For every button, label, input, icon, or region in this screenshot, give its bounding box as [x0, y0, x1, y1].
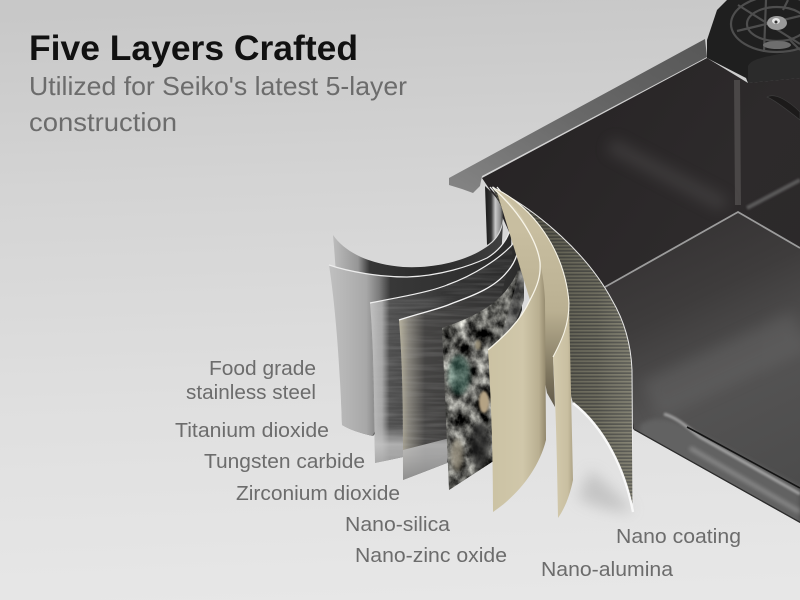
sink rim [449, 39, 707, 193]
label: titanium dioxide: Titanium dioxide [175, 420, 329, 442]
layer: tungsten carbide [370, 187, 520, 465]
sink lower lip [634, 414, 800, 530]
label: nano-silica: Nano-silica [345, 514, 451, 536]
bottle rinser [707, 0, 800, 83]
sink inner corner seams [605, 212, 800, 287]
subtitle: construction [29, 107, 177, 137]
rinser front lip [748, 50, 800, 83]
layer: titanium dioxide [329, 187, 512, 436]
layer: hinge strip [485, 186, 503, 245]
sink basin [482, 58, 800, 530]
layer: food grade stainless steel [333, 222, 503, 436]
label: food grade stainless steel: stainless steel [186, 382, 316, 404]
layer: nano-silica marble [442, 267, 524, 490]
label: nano-alumina: Nano-alumina [541, 559, 674, 581]
sink front wall floor [605, 212, 800, 523]
alumina inner face [496, 189, 569, 407]
subtitle: Utilized for Seiko's latest 5-layer [29, 71, 407, 101]
label: nano coating: Nano coating [616, 526, 741, 548]
label: food grade stainless steel: Food grade [209, 358, 316, 380]
layer: nano-zinc oxide beige [488, 188, 546, 512]
layer: nano coating mesh [492, 187, 633, 512]
rinser chrome nozzle [763, 16, 791, 49]
rinser grate [731, 0, 800, 52]
alumina front face [553, 303, 573, 518]
title: Five Layers Crafted [29, 29, 358, 68]
floor shadow beside layers [578, 470, 633, 512]
subtitle [29, 71, 407, 137]
layer: nano-alumina beige [496, 189, 573, 518]
label: tungsten carbide: Tungsten carbide [204, 451, 365, 473]
layer stack [329, 186, 633, 518]
label: nano-zinc oxide: Nano-zinc oxide [355, 545, 507, 567]
label: food grade stainless steel [186, 358, 316, 404]
label: zirconium dioxide: Zirconium dioxide [236, 483, 400, 505]
layer: zirconium dioxide [399, 187, 522, 482]
